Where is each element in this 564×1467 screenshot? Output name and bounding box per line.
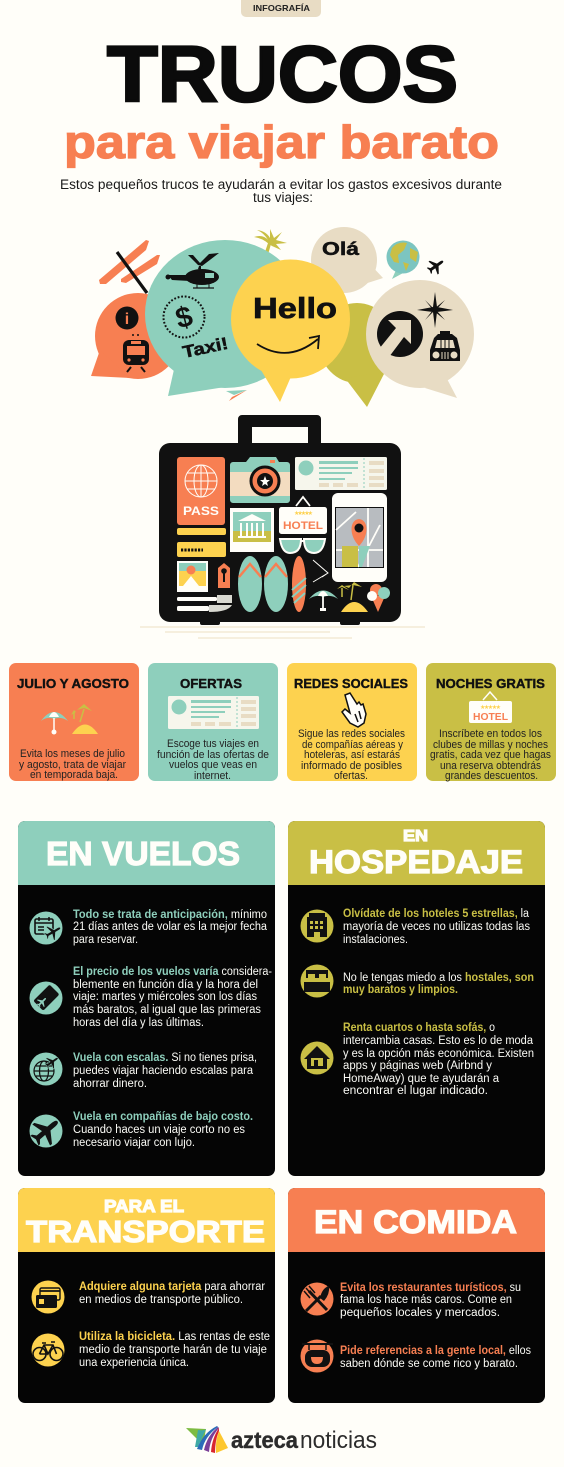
- icon: globe bubble: [386, 240, 420, 279]
- text: olá: Olá: [322, 239, 360, 259]
- heading: EN VUELOS: [46, 835, 240, 872]
- bubble: beige: [366, 280, 474, 398]
- text: bajo costo: [73, 1111, 253, 1149]
- text: restaurantes: [340, 1282, 521, 1319]
- icon: calendar plane: [30, 912, 64, 944]
- hotel sign: ★★★★★: [294, 510, 313, 517]
- umbrella: [309, 590, 338, 611]
- text: bicicleta: [79, 1331, 270, 1369]
- panel: redes sociales: informado de posibles: [301, 760, 402, 772]
- passport: PASS: [183, 506, 219, 518]
- bubble: olive: [319, 303, 395, 407]
- panel: noches gratis: Inscríbete en todos los: [439, 728, 542, 740]
- text: hoteles: [343, 908, 530, 946]
- panel: noches gratis: gratis, cada vez que hagas: [430, 749, 551, 761]
- text: anticipación: [73, 909, 268, 946]
- panel: en comida: [288, 1188, 545, 1403]
- panel: para el transporte: [18, 1188, 275, 1403]
- text: bajo costo: Vuela en compañías de bajo costo.: [73, 1111, 253, 1123]
- museum picture: [230, 508, 274, 552]
- icon: palm: [254, 229, 287, 258]
- icon: compass star: [417, 292, 453, 328]
- text: bicicleta: una experiencia única.: [79, 1357, 189, 1369]
- text: anticipación: Todo se trata de anticipación, mínimo: [73, 909, 267, 921]
- text: anticipación: 21 días antes de volar es la mejor fecha: [73, 921, 268, 933]
- panel: redes sociales: de compañías aéreas y: [302, 739, 403, 751]
- illustration: speech bubbles: [91, 227, 474, 407]
- text: precio: horas del día y las últimas.: [73, 1017, 204, 1029]
- text: precio: El precio de los vuelos varía considera-: [73, 966, 272, 978]
- ticket: [295, 457, 387, 490]
- text: bajo costo: necesario viajar con lujo.: [73, 1137, 195, 1149]
- icon: smile arrow: [257, 336, 319, 353]
- photo: [177, 561, 208, 592]
- text: hostales: muy baratos y limpios.: [343, 984, 458, 996]
- phone: [332, 493, 387, 582]
- icon: small plane: [424, 255, 448, 277]
- panel: redes sociales: hoteleras, así estarás: [304, 749, 400, 761]
- panel: redes sociales: Sigue las redes sociales: [298, 728, 405, 740]
- icon: dollar coin: $: [172, 300, 196, 336]
- text: gente local: saben dónde se come rico y barato.: [340, 1358, 518, 1370]
- panel: julio y agosto: [9, 663, 139, 781]
- panel: redes sociales: [287, 663, 417, 782]
- heading: PARA EL: [104, 1196, 184, 1216]
- panel: ofertas: internet.: [194, 770, 231, 782]
- intro text: Estos pequeños trucos te ayudarán a evitar los gastos excesivos durante: [60, 177, 502, 192]
- text: renta: intercambia casas. Esto es lo de moda: [343, 1035, 534, 1047]
- icon: paper plane: [226, 390, 247, 401]
- hotel sign: HOTEL: [283, 520, 323, 532]
- text: hoteles: Olvídate de los hoteles 5 estrellas, la: [343, 908, 530, 920]
- icon: bicycle: [32, 1334, 64, 1366]
- palm island: [337, 582, 368, 612]
- icon: bed: [300, 964, 334, 998]
- key tag: [218, 563, 230, 588]
- surfboard: [292, 556, 306, 612]
- hotel sign: [279, 497, 327, 534]
- logo: azteca noticias: noticias: [300, 1427, 377, 1454]
- text: renta: apps y páginas web (Airbnd y: [343, 1060, 492, 1072]
- icon: taxi: [430, 331, 460, 361]
- panel: en hospedaje: [288, 821, 545, 1176]
- panel: en vuelos: [18, 821, 275, 1176]
- icon: arrow circle: [377, 311, 423, 357]
- panel: noches gratis: una reserva obtendrás: [440, 760, 541, 772]
- ice cream: [367, 584, 390, 612]
- icon: hotel sign: [469, 692, 512, 723]
- panel: julio y agosto: en temporada baja.: [30, 769, 118, 781]
- text: hostales: No le tengas miedo a los hostales, son: [343, 972, 534, 984]
- text: renta: HomeAway) que te ayudarán a: [343, 1073, 500, 1085]
- heading: EN: [403, 828, 428, 845]
- icon: hotel: [300, 910, 334, 942]
- icon: hotel sign: HOTEL: [473, 712, 508, 723]
- text: renta: [343, 1022, 534, 1097]
- text: tarjeta: Adquiere alguna tarjeta para ahorrar: [79, 1281, 265, 1293]
- text: hoteles: mayoría de veces no utilizas todas las: [343, 921, 530, 933]
- bubble: teal: [145, 240, 305, 396]
- flip-flops: [238, 556, 288, 612]
- panel: ofertas: vuelos que veas en: [169, 759, 257, 771]
- bubble: yellow: [231, 260, 350, 402]
- title: TRUCOS: [107, 29, 458, 118]
- logo: azteca noticias: azteca: [231, 1427, 298, 1453]
- yellow cards: [177, 528, 226, 557]
- hanger: [313, 560, 328, 582]
- text: precio: blemente en función día y la hora del: [73, 979, 258, 991]
- icon: umbrella and island: [41, 704, 98, 734]
- icon: info: [116, 306, 138, 330]
- text: hoteles: instalaciones.: [343, 934, 408, 946]
- panel: redes sociales: ofertas.: [334, 770, 368, 782]
- icon: logo mark: [186, 1426, 228, 1453]
- text: tarjeta: en medios de transporte público.: [79, 1294, 243, 1306]
- text: precio: viaje: martes y miércoles son los días: [73, 991, 257, 1003]
- text: renta: encontrar el lugar indicado.: [343, 1085, 488, 1097]
- tag: infografía: [241, 0, 321, 17]
- panel: redes sociales: REDES SOCIALES: [294, 676, 408, 691]
- icon: train: [123, 334, 149, 372]
- icon: signpost: [99, 240, 160, 293]
- heading: [309, 828, 523, 880]
- intro text: tus viajes:: [253, 190, 313, 205]
- panel: ofertas: Escoge tus viajes en: [167, 738, 259, 750]
- text: bajo costo: Cuando haces un viaje corto no es: [73, 1124, 245, 1136]
- text: renta: y es la opción más económica. Existen: [343, 1048, 534, 1060]
- text: escalas: [73, 1052, 257, 1090]
- icon: dollar coin: [164, 296, 204, 338]
- icon: ticket: [168, 696, 259, 729]
- heading: HOSPEDAJE: [309, 844, 523, 880]
- panel: noches gratis: clubes de millas y noches: [433, 739, 548, 751]
- subtitle: para viajar barato: [64, 116, 499, 168]
- intro text: [60, 177, 502, 205]
- text: precio: más baratos, al igual que las primeras: [73, 1004, 261, 1016]
- icon: fork and knife: [300, 1282, 334, 1316]
- logo: azteca noticias: [186, 1426, 377, 1454]
- text: taxi: Taxi!: [181, 334, 230, 362]
- icon: plane: [26, 1111, 66, 1151]
- heading: EN COMIDA: [314, 1204, 517, 1240]
- camera: [230, 457, 290, 503]
- icon: hotel sign: ★★★★★: [480, 704, 501, 711]
- text: gente local: [340, 1345, 531, 1370]
- heading: TRANSPORTE: [26, 1214, 265, 1249]
- text: hostales: [343, 972, 534, 996]
- icon: house: [300, 1042, 334, 1074]
- text: escalas: puedes viajar haciendo escalas para: [73, 1065, 254, 1077]
- text: restaurantes: fama los hace más caros. Come en: [340, 1294, 512, 1306]
- panel: noches gratis: NOCHES GRATIS: [436, 676, 545, 691]
- icon: hand cursor: [342, 693, 366, 727]
- text: anticipación: para reservar.: [73, 934, 138, 946]
- text: tarjeta: [79, 1281, 265, 1306]
- sunglasses: [280, 539, 325, 553]
- icon: restaurant sign: [300, 1340, 334, 1372]
- text: precio: [73, 966, 272, 1029]
- passport: [177, 457, 225, 525]
- icon: boarding pass: [30, 982, 62, 1014]
- tag: infografía: INFOGRAFÍA: [253, 3, 310, 13]
- icon: globe plane: [30, 1052, 62, 1086]
- icon: cards: [32, 1280, 64, 1314]
- text: renta: Renta cuartos o hasta sofás, o: [343, 1022, 495, 1034]
- panel: noches gratis: [426, 663, 556, 782]
- text: escalas: ahorrar dinero.: [73, 1078, 147, 1090]
- heading: [26, 1196, 265, 1249]
- illustration: suitcase: [140, 415, 425, 638]
- icon: info: i: [125, 311, 129, 328]
- panel: ofertas: [148, 663, 278, 782]
- text: restaurantes: Evita los restaurantes turísticos, su: [340, 1282, 521, 1294]
- panel: noches gratis: grandes descuentos.: [445, 770, 538, 782]
- icon: helicopter: [166, 253, 219, 288]
- panel: julio y agosto: JULIO Y AGOSTO: [17, 676, 129, 691]
- text: restaurantes: pequeños locales y mercados.: [340, 1307, 500, 1319]
- cutlery: [177, 595, 232, 612]
- panel: ofertas: función de las ofertas de: [157, 749, 269, 761]
- text: bicicleta: Utiliza la bicicleta. Las rentas de este: [79, 1331, 270, 1343]
- bubble: olá: [311, 227, 383, 293]
- panel: julio y agosto: Evita los meses de julio: [20, 748, 125, 760]
- panel: julio y agosto: y agosto, trata de viajar: [19, 759, 126, 771]
- text: bicicleta: medio de transporte harán de tu viaje: [79, 1344, 267, 1356]
- panel: ofertas: OFERTAS: [180, 676, 242, 691]
- bubble: orange: [91, 293, 181, 379]
- text: gente local: Pide referencias a la gente local, ellos: [340, 1345, 531, 1357]
- text: escalas: Vuela con escalas. Si no tienes prisa,: [73, 1052, 257, 1064]
- text: hello: Hello: [253, 293, 337, 325]
